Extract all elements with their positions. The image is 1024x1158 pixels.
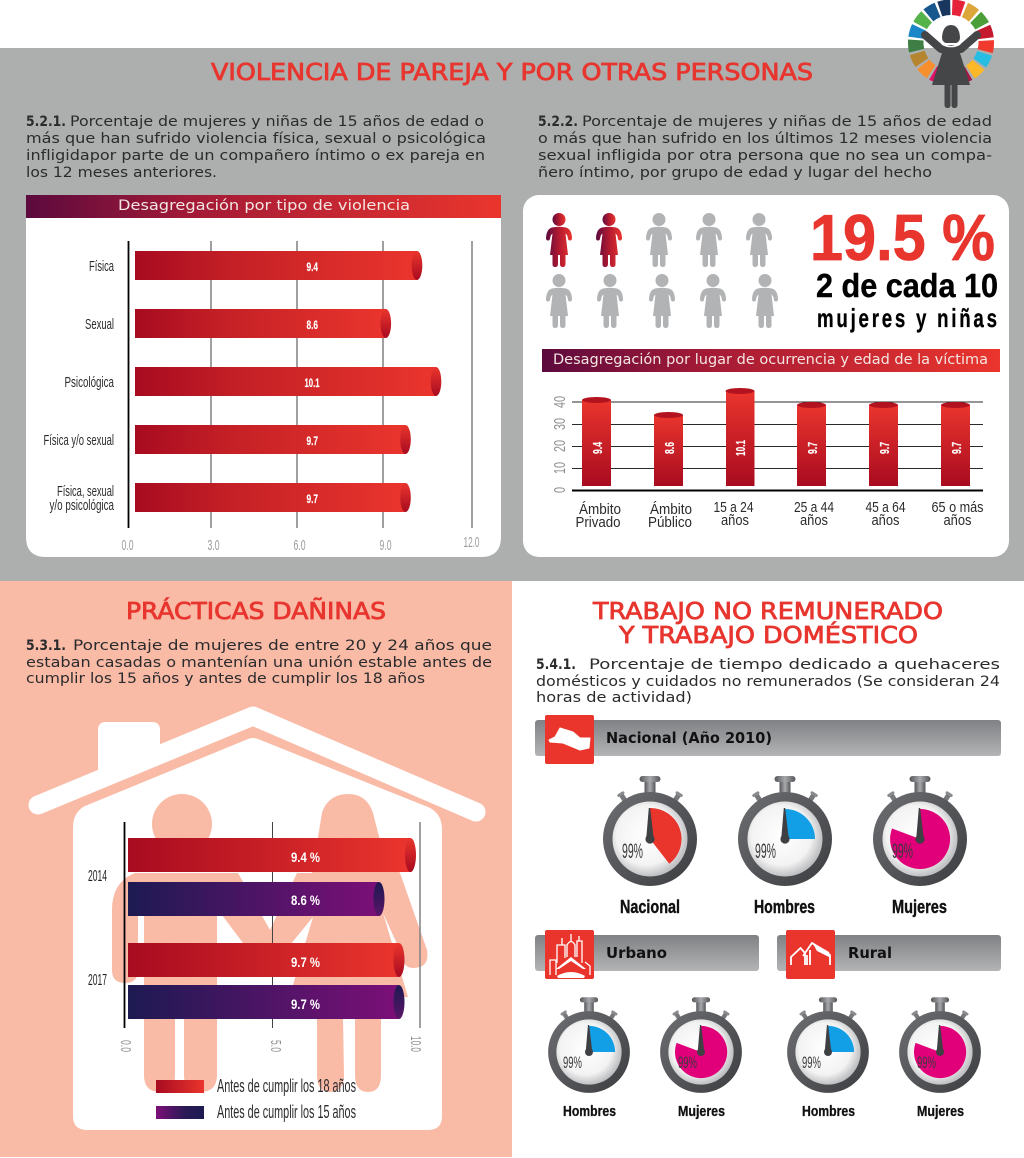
heading: trabajo no remunerado: TRABAJO NO REMUNERADO: [592, 599, 943, 625]
icon: house body: [73, 738, 442, 1130]
banner: Nacional: [535, 715, 1001, 764]
stopwatch: Rural Hombres: Hombres: [802, 1103, 855, 1120]
stopwatch: Urbano Hombres: Hombres: [563, 1103, 616, 1120]
chart: horizontal bars by type: Física y/o sexual: [44, 432, 114, 449]
chart: horizontal bars by type: 9.4: [306, 260, 318, 274]
text block: indicator 5.2.1: Porcentaje de mujeres y niñas de 15 años de edad o: [70, 114, 484, 130]
chart: vertical bars by place and age: Privado: [576, 514, 620, 531]
chart: vertical bars by place and age: 9.7: [805, 442, 820, 454]
chart: marriage before 15 and 18: 9.7 %: [291, 996, 320, 1012]
chart: vertical bars by place and age: Ámbito: [579, 501, 621, 518]
panel: sexual violence by other persons: [523, 195, 1009, 557]
stopwatch: Nacional: 99%: [622, 840, 643, 863]
chart: vertical bars by place and age: Ámbito: [650, 501, 692, 518]
stopwatch: Rural Mujeres: 99%: [917, 1053, 936, 1072]
text block: indicator 5.3.1: Porcentaje de mujeres de entre 20 y 24 años que: [73, 638, 492, 654]
stopwatch: Rural Hombres: 99%: [802, 1053, 821, 1072]
chart: horizontal bars by type: 9.0: [380, 537, 392, 554]
stopwatch: Urbano Mujeres: 99%: [678, 1053, 697, 1072]
panel: harmful practices background: [0, 581, 512, 1157]
callout: mujeres y niñas: mujeres y niñas: [817, 303, 997, 333]
stopwatch: Urbano Mujeres: Mujeres: [678, 1103, 725, 1120]
heading: breakdown by type: [26, 195, 501, 218]
chart: vertical bars by place and age: 65 o más: [932, 499, 984, 516]
icon: roof: [38, 716, 476, 812]
text block: indicator 5.4.1: Porcentaje de tiempo dedicado a quehaceres: [589, 657, 1000, 673]
chart: vertical bars by place and age: 9.7: [877, 442, 892, 454]
text block: indicator 5.4.1: [536, 657, 1000, 706]
stopwatch: Hombres: Hombres: [754, 897, 815, 917]
stopwatch: Mujeres: Mujeres: [892, 897, 947, 917]
stopwatch: Mujeres: 99%: [892, 840, 913, 863]
heading: trabajo no remunerado: [592, 599, 943, 649]
heading: prácticas dañinas: PRÁCTICAS DAÑINAS: [126, 597, 386, 625]
stopwatch: Rural Hombres: [787, 997, 869, 1120]
chart: vertical bars by place and age: 30: [552, 418, 569, 430]
text block: indicator 5.3.1: cumplir los 15 años y antes de cumplir los 18 años: [26, 671, 425, 687]
chart: marriage before 15 and 18: 0.0: [117, 1040, 134, 1052]
text block: indicator 5.2.1: más que han sufrido violencia física, sexual o psicológica: [26, 131, 486, 147]
panel: violence section background: [0, 48, 1024, 581]
chart: horizontal bars by type: 6.0: [294, 537, 306, 554]
chart: vertical bars by place and age: años: [944, 512, 972, 529]
chart: vertical bars by place and age: años: [872, 512, 900, 529]
text block: indicator 5.3.1: 5.3.1.: [26, 638, 66, 654]
panel: breakdown by type of violence: [26, 195, 501, 557]
stopwatch: Hombres: 99%: [755, 840, 776, 863]
text block: indicator 5.2.1: infligidapor parte de un compañero íntimo o ex pareja en: [26, 148, 485, 164]
chart: horizontal bars by type: 8.6: [306, 318, 318, 332]
icon: El Salvador map: [545, 715, 594, 764]
chart: horizontal bars by type: Física, sexual: [57, 483, 114, 500]
chart: horizontal bars by type: 9.7: [306, 492, 318, 506]
banner: Rural: Rural: [848, 944, 892, 962]
icon: city: [545, 930, 594, 979]
chart: horizontal bars by type: Física: [89, 258, 114, 275]
legend: Antes de cumplir los 15 años: [217, 1102, 356, 1122]
chart: marriage before 15 and 18: 8.6 %: [291, 892, 320, 908]
text block: indicator 5.4.1: horas de actividad): [536, 690, 692, 706]
chart: marriage before 15 and 18: 9.7 %: [291, 954, 320, 970]
chart: vertical bars by place and age: 10: [552, 462, 569, 474]
chart: vertical bars by place and age: Público: [648, 514, 692, 531]
chart: vertical bars by place and age: 0: [552, 487, 569, 493]
banner: Nacional: Nacional (Año 2010): [606, 729, 772, 747]
icon: chimney: [98, 722, 160, 776]
chart: vertical bars by place and age: 15 a 24: [714, 499, 754, 516]
chart: vertical bars by place and age: 20: [552, 440, 569, 452]
text block: indicator 5.2.2: ñero íntimo, por grupo de edad y lugar del hecho: [538, 165, 932, 181]
chart: vertical bars by place and age: años: [721, 512, 749, 529]
chart: horizontal bars by type: 10.1: [304, 376, 320, 390]
chart: vertical bars by place and age: 9.4: [590, 441, 605, 454]
chart: vertical bars by place and age: [552, 388, 984, 531]
chart: horizontal bars by type: 0.0: [122, 537, 134, 554]
banner: Urbano: [535, 930, 759, 979]
legend: [156, 1076, 356, 1122]
banner: Urbano: Urbano: [606, 944, 667, 962]
stopwatch: Hombres: [738, 776, 832, 917]
text block: indicator 5.2.1: 5.2.1.: [26, 114, 66, 130]
text block: indicator 5.2.2: 5.2.2.: [538, 114, 578, 130]
callout: 2 de cada 10: 2 de cada 10: [816, 267, 998, 304]
chart: vertical bars by place and age: 9.7: [949, 442, 964, 454]
text block: indicator 5.2.1: los 12 meses anteriores.: [26, 165, 217, 181]
chart: marriage before 15 and 18: 9.4 %: [291, 849, 320, 865]
icon: SDG 5 wheel with woman: [901, 0, 1001, 108]
chart: marriage before 15 and 18: 2017: [88, 972, 107, 989]
chart: vertical bars by place and age: años: [800, 512, 828, 529]
text block: indicator 5.2.2: o más que han sufrido en los últimos 12 meses violencia: [538, 131, 992, 147]
chart: horizontal bars by type: [44, 241, 480, 554]
icon: rural houses: [786, 930, 835, 979]
text block: indicator 5.3.1: [26, 638, 492, 687]
heading: trabajo no remunerado: Y TRABAJO DOMÉSTICO: [618, 621, 918, 649]
chart: vertical bars by place and age: 45 a 64: [866, 499, 906, 516]
chart: marriage before 15 and 18: 2014: [88, 868, 107, 885]
icon: man silhouette: [112, 794, 290, 1092]
stopwatch: Urbano Mujeres: [660, 997, 742, 1120]
chart: horizontal bars by type: Psicológica: [64, 374, 114, 391]
chart: vertical bars by place and age: 40: [552, 396, 569, 408]
icon: woman silhouette: [262, 794, 427, 1092]
stopwatch: Urbano Hombres: [548, 997, 630, 1120]
heading: breakdown by place and age: [542, 349, 1000, 372]
icon: ten women pictogram, 2 highlighted: [546, 213, 778, 328]
chart: marriage before 15 and 18: 10.0: [407, 1036, 424, 1052]
heading: breakdown by place and age: Desagregación por lugar de ocurrencia y edad de la víctima: [553, 352, 988, 368]
heading: breakdown by type: Desagregación por tipo de violencia: [118, 198, 410, 214]
title: VIOLENCIA DE PAREJA Y POR OTRAS PERSONAS: [211, 60, 813, 86]
chart: horizontal bars by type: y/o psicológica: [50, 497, 114, 514]
stopwatch: Nacional: [603, 776, 697, 917]
chart: horizontal bars by type: Sexual: [85, 316, 114, 333]
chart: marriage before 15 and 18: 5.0: [267, 1040, 284, 1052]
banner: Rural: [777, 930, 1001, 979]
chart: marriage before 15 and 18: [88, 822, 424, 1052]
chart: horizontal bars by type: 3.0: [208, 537, 220, 554]
text block: indicator 5.2.2: sexual infligida por otra persona que no sea un compa-: [538, 148, 992, 164]
text block: indicator 5.2.2: Porcentaje de mujeres y niñas de 15 años de edad: [582, 114, 992, 130]
text block: indicator 5.2.2: [538, 114, 992, 181]
legend: Antes de cumplir los 18 años: [217, 1076, 356, 1096]
chart: vertical bars by place and age: 25 a 44: [794, 499, 834, 516]
chart: vertical bars by place and age: 8.6: [662, 442, 677, 454]
text block: indicator 5.4.1: domésticos y cuidados no remunerados (Se consideran 24: [536, 674, 1000, 690]
chart: vertical bars by place and age: 10.1: [733, 440, 748, 456]
stopwatch: Rural Mujeres: Mujeres: [917, 1103, 964, 1120]
big number 19.5 %: 19.5 %: [810, 201, 995, 274]
stopwatch: Rural Mujeres: [899, 997, 981, 1120]
illustration: house with couple: [38, 716, 476, 1130]
stopwatch: Mujeres: [873, 776, 967, 917]
stopwatch: Urbano Hombres: 99%: [563, 1053, 582, 1072]
stopwatch: Nacional: Nacional: [620, 897, 680, 917]
text block: indicator 5.2.1: [26, 114, 486, 181]
text block: indicator 5.4.1: 5.4.1.: [536, 657, 576, 673]
chart: horizontal bars by type: 12.0: [464, 534, 480, 551]
text block: indicator 5.3.1: estaban casadas o mantenían una unión estable antes de: [26, 655, 492, 671]
chart: horizontal bars by type: 9.7: [306, 434, 318, 448]
